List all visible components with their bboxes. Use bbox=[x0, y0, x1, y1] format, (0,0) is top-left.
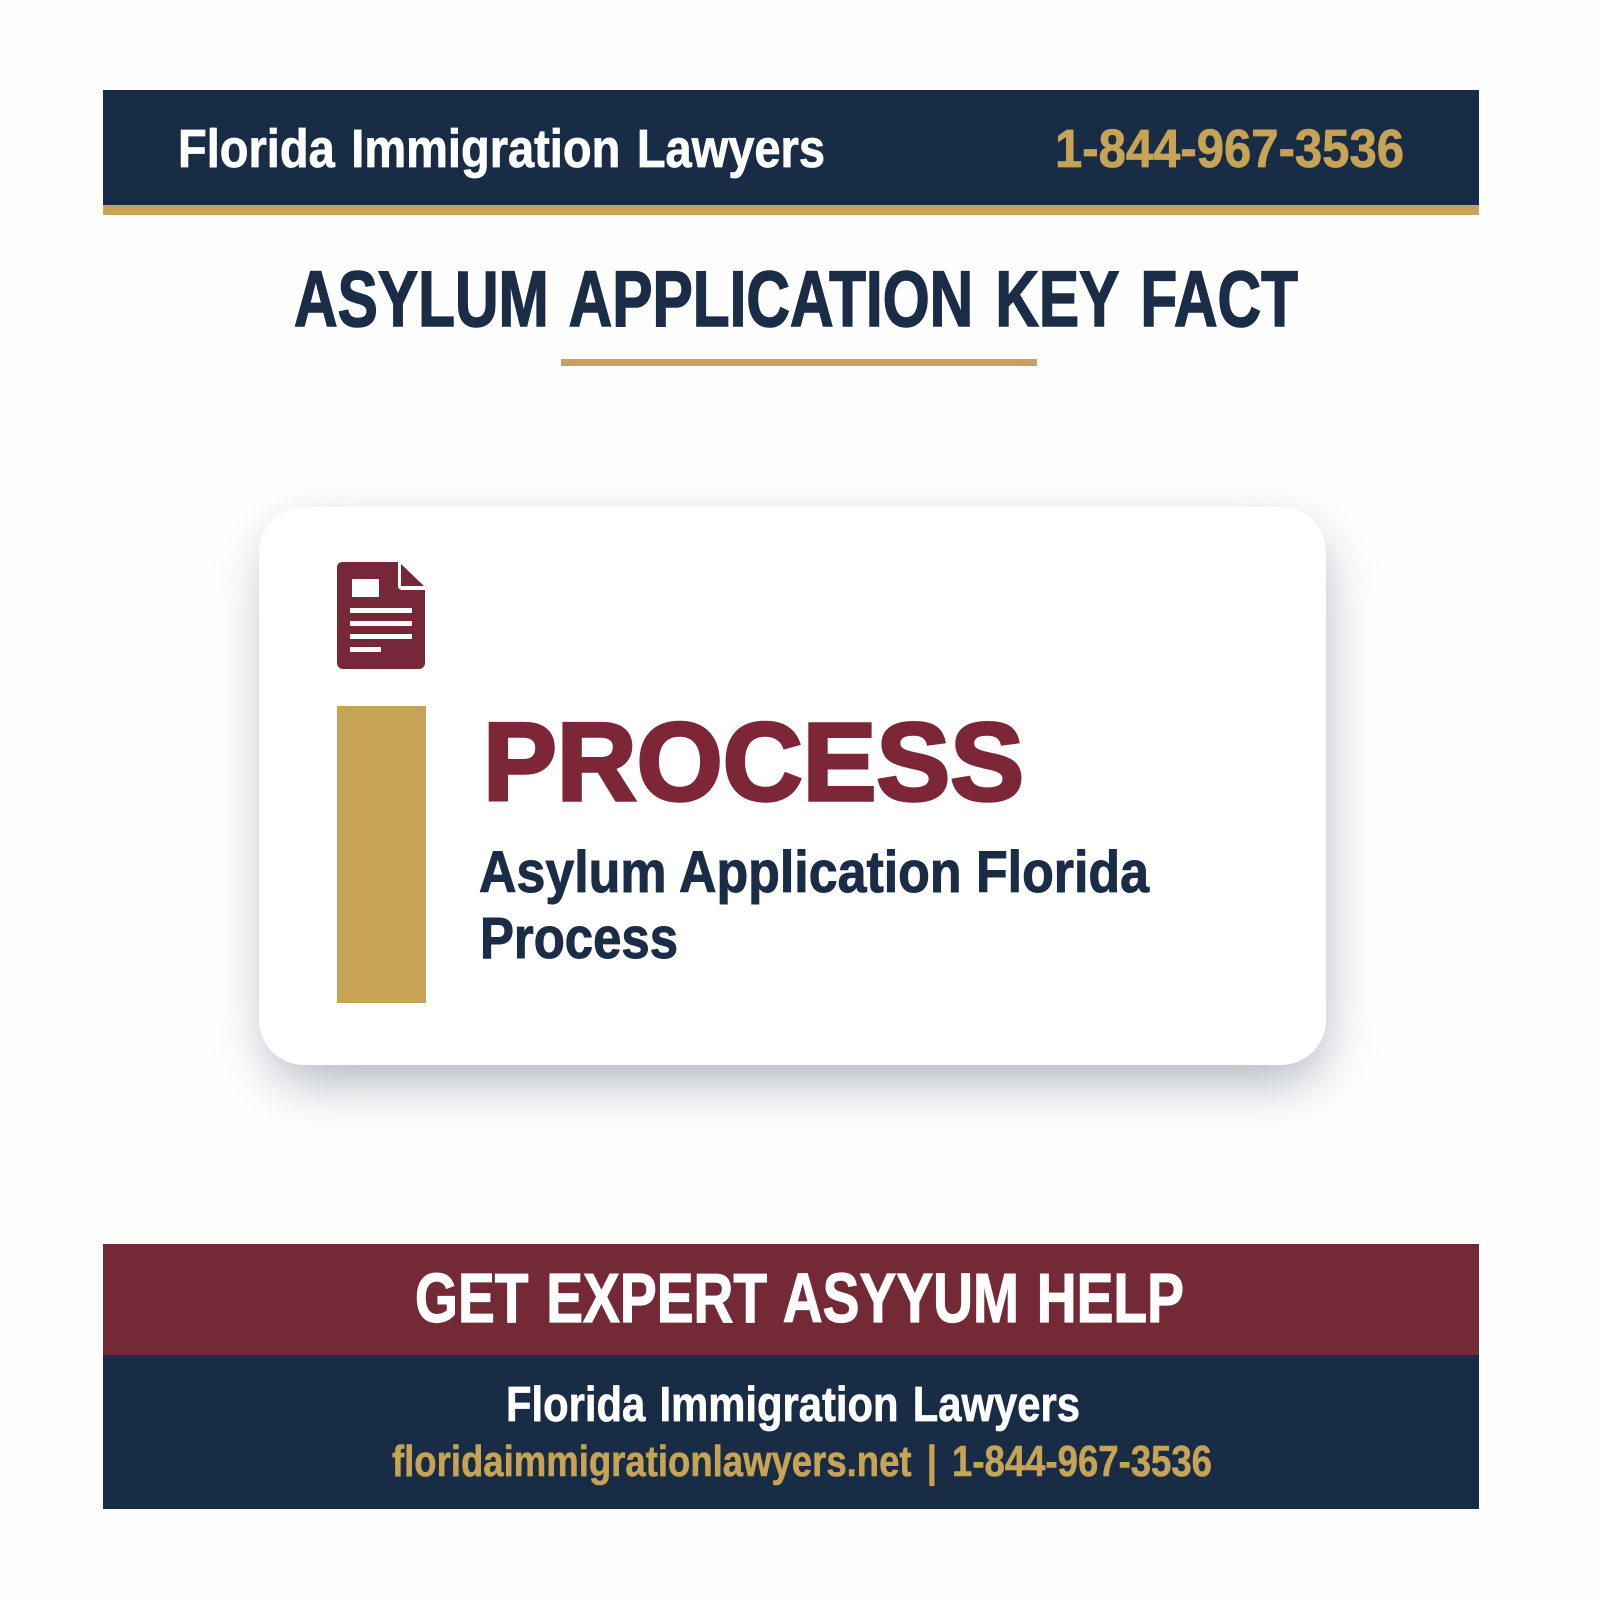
gold accent bar bbox=[337, 706, 426, 1003]
footer contact details: floridaimmigrationlawyers.net | 1-844-967-3536 bbox=[392, 1437, 1212, 1487]
call to action banner: GET EXPERT ASYYUM HELP bbox=[415, 1259, 1184, 1337]
fact description: Asylum Application Florida bbox=[479, 840, 1150, 905]
call to action banner bbox=[103, 1244, 1479, 1355]
header banner bbox=[103, 90, 1479, 215]
icon: document bbox=[337, 562, 425, 669]
phone number: 1-844-967-3536 bbox=[1055, 119, 1404, 179]
fact description: Process bbox=[480, 906, 678, 971]
title: ASYLUM APPLICATION KEY FACT bbox=[294, 254, 1298, 343]
firm name: Florida Immigration Lawyers bbox=[178, 119, 825, 179]
fact description bbox=[479, 840, 1150, 971]
title bbox=[294, 254, 1298, 366]
footer firm name: Florida Immigration Lawyers bbox=[506, 1378, 1080, 1432]
footer banner bbox=[103, 1355, 1479, 1509]
fact heading: PROCESS bbox=[483, 701, 1024, 824]
panel: process card bbox=[259, 507, 1326, 1082]
